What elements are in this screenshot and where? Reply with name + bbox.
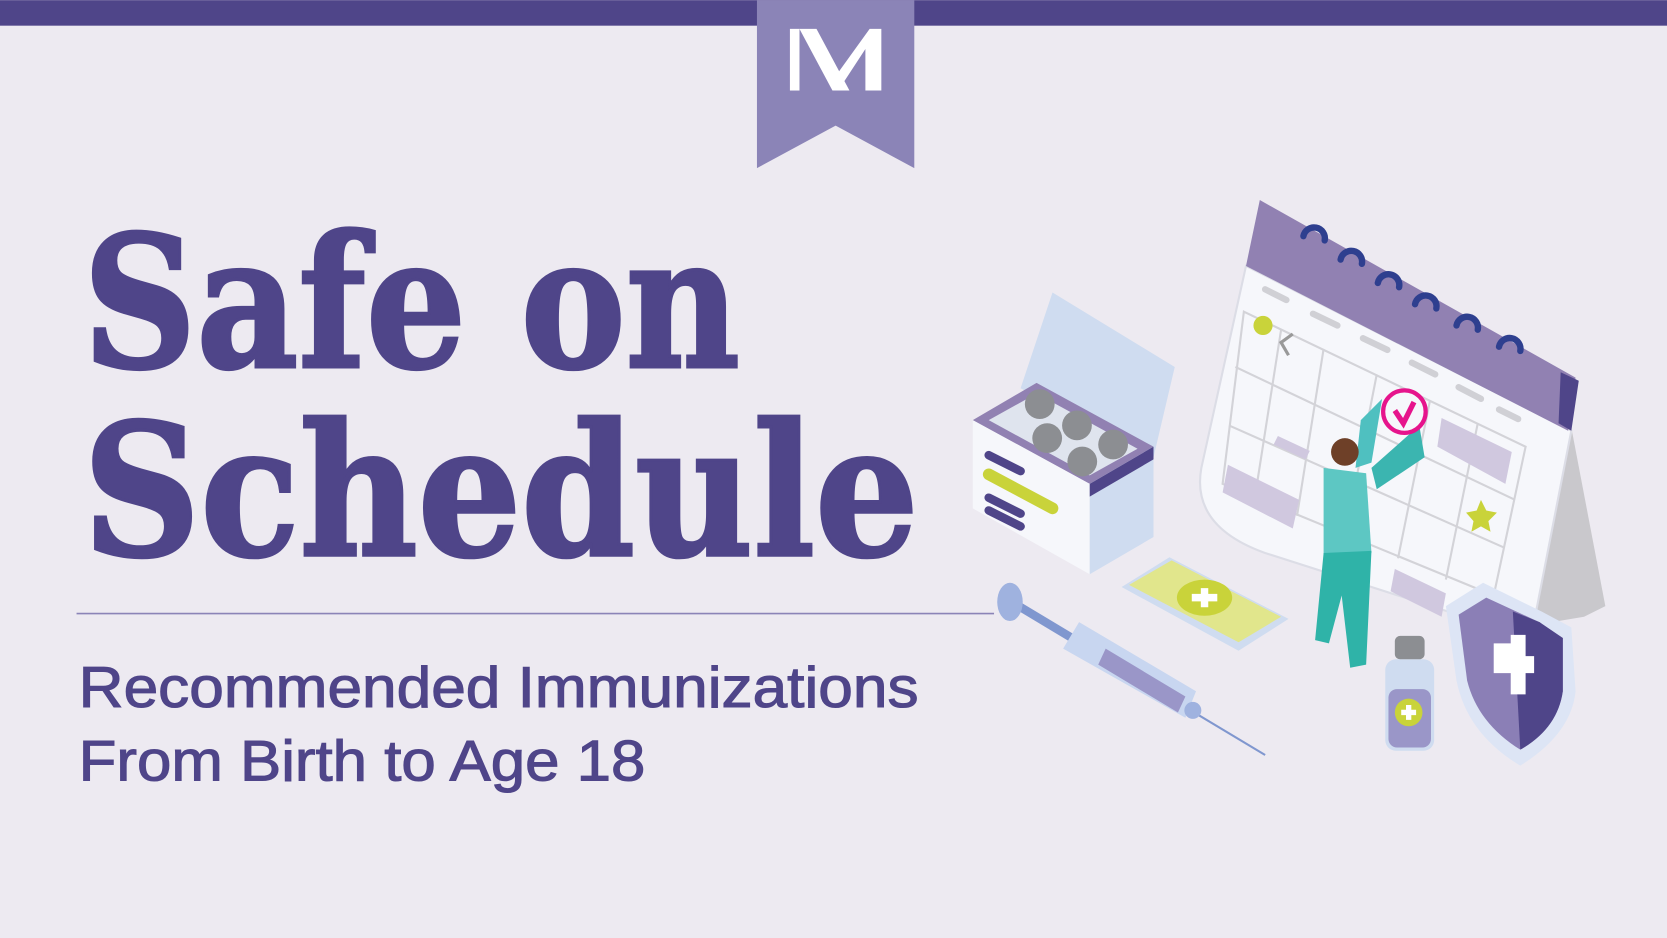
logo NM (790, 29, 881, 91)
title (83, 196, 919, 599)
syringe (997, 583, 1265, 755)
calendar (1200, 200, 1605, 638)
subtitle: Recommended Immunizations (79, 656, 919, 720)
shield (1446, 583, 1576, 766)
subtitle: From Birth to Age 18 (79, 729, 645, 793)
vial (1385, 636, 1434, 751)
title: Schedule (83, 384, 919, 599)
person (1315, 390, 1426, 668)
banner logo (757, 0, 914, 168)
subtitle (79, 656, 919, 793)
phone (1122, 557, 1289, 651)
top bar (0, 0, 1667, 26)
vial box (973, 293, 1175, 574)
illustration (973, 200, 1605, 766)
title: Safe on (83, 196, 740, 411)
